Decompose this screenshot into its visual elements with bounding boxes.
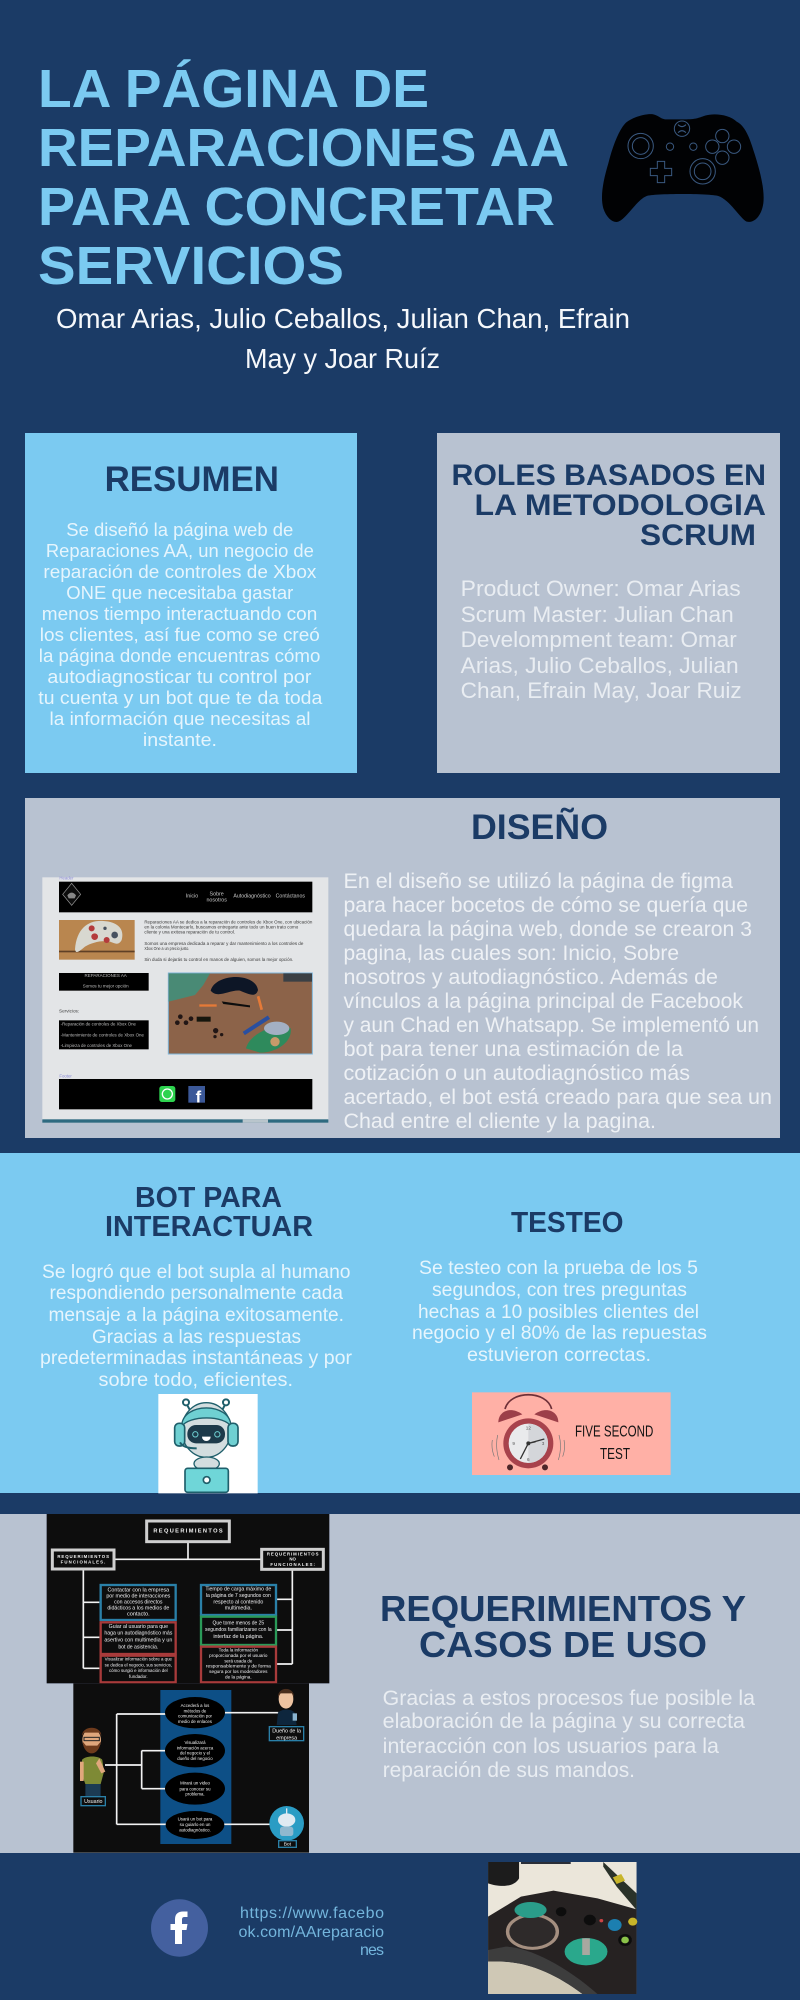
text: roles body: Develompment team: Omar	[461, 627, 737, 652]
use cases: Usará un bot para	[178, 1817, 213, 1822]
image: five second test: FIVE SECOND	[575, 1424, 653, 1441]
boxes: non functional requirements: segundos familiarizarse con la	[205, 1627, 273, 1633]
use cases: Visualizará	[184, 1740, 206, 1745]
mockup: header bar	[59, 882, 312, 912]
diagram: requerimientos	[47, 1514, 329, 1683]
authors	[56, 303, 630, 374]
heading: bot para interactuar: INTERACTUAR	[105, 1211, 313, 1243]
boxes: non functional requirements: proporcionada por el usuario	[209, 1653, 268, 1658]
text: resumen body: la información que necesitas al	[50, 709, 310, 729]
title: PARA CONCRETAR	[38, 177, 555, 237]
mockup: services box: -Reparación de controles de Xbox One	[61, 1022, 136, 1027]
text: resumen body: los clientes, así fue como se creó	[40, 625, 320, 645]
mockup: footer bar with social icons	[59, 1079, 312, 1109]
boxes: functional requirements: asertivo con multimedia y un	[104, 1638, 172, 1644]
boxes: functional requirements: fundador.	[129, 1674, 148, 1679]
link: facebook url: nes	[360, 1942, 384, 1959]
text: roles body: Arias, Julio Ceballos, Julian	[461, 653, 739, 678]
screenshot: web page mockup: Servicios:	[59, 1009, 79, 1014]
boxes: non functional requirements: interfaz de la página.	[213, 1634, 264, 1640]
mockup: footer bar with social icons: f	[196, 1088, 202, 1107]
authors: May y Joar Ruíz	[245, 343, 440, 374]
text: diseño body: nosotros y autodiagnóstico. Además de	[344, 966, 718, 989]
boxes: non functional requirements: de la página.	[225, 1675, 252, 1680]
image: five second test: 9	[512, 1441, 515, 1446]
box: requerimientos funcionales: REQUERIMIENTOS	[57, 1554, 109, 1559]
text: testeo body	[412, 1258, 707, 1366]
figure: bot	[269, 1806, 304, 1848]
mockup: slogan box	[59, 973, 149, 991]
text: diseño body: Chad entre el cliente y la pagina.	[344, 1110, 656, 1133]
text: bot body	[40, 1262, 353, 1391]
use cases: autodiagnóstico.	[179, 1828, 211, 1833]
screenshot: web page mockup: Header	[59, 876, 74, 881]
box: requerimientos funcionales	[52, 1550, 114, 1569]
boxes: functional requirements: didácticos a los medios de	[107, 1606, 169, 1612]
text: requerimientos body: interacción con los usuarios para la	[383, 1735, 719, 1758]
text: roles body: Scrum Master: Julian Chan	[461, 602, 734, 627]
text: requerimientos body: elaboración de la página y su correcta	[383, 1710, 745, 1733]
heading: requerimientos y casos de uso: CASOS DE USO	[419, 1624, 707, 1665]
heading: roles	[452, 459, 766, 552]
text: diseño body: vínculos a la página principal de Facebook	[344, 990, 743, 1013]
text: diseño body: bot para tener una estimación de la	[344, 1038, 683, 1061]
box: requerimientos no funcionales: FUNCIONALES:	[270, 1562, 316, 1567]
panel: diseño	[25, 798, 780, 1138]
boxes: non functional requirements: Toda la información	[219, 1647, 259, 1652]
text: testeo body: segundos, con tres preguntas	[432, 1280, 687, 1301]
figure: usuario	[80, 1728, 105, 1806]
use cases: problema.	[185, 1792, 205, 1797]
use cases: para conocer su	[179, 1786, 211, 1791]
mockup: services box: -Mantenimiento de controles de Xbox One	[61, 1032, 144, 1037]
text: testeo body: hechas a 10 posibles clientes del	[418, 1302, 699, 1323]
text: diseño body: cotización o un autodiagnóstico más	[344, 1062, 690, 1085]
screenshot: web page mockup: Footer	[59, 1073, 72, 1078]
panel: resumen	[25, 433, 357, 773]
boxes: functional requirements: con accesos directos	[114, 1599, 163, 1605]
authors: Omar Arias, Julio Ceballos, Julian Chan, Efrain	[56, 303, 630, 334]
box: requerimientos root: REQUERIMIENTOS	[153, 1529, 223, 1535]
boxes: functional requirements: haga un autodiagnóstico más	[104, 1631, 173, 1637]
boxes: non functional requirements: responsablemente y de forma	[206, 1664, 271, 1669]
text: roles body: Chan, Efrain May, Joar Ruiz	[461, 678, 742, 703]
mockup: intro text: Somos una empresa dedicada a reparar y dar mantenimiento a los controles de	[144, 941, 304, 946]
text: diseño body: quedara la página web, donde se crearon 3	[344, 918, 752, 941]
figure: dueño de la empresa	[269, 1689, 304, 1741]
text: testeo body: negocio y el 80% de las repuestas	[412, 1323, 707, 1344]
text: testeo body: estuvieron correctas.	[467, 1345, 651, 1366]
heading: requerimientos y casos de uso	[380, 1588, 746, 1665]
boxes: non functional requirements: Tiempo de carga máximo de	[205, 1587, 271, 1593]
image: five second test: TEST	[600, 1446, 630, 1463]
figure: dueño de la empresa: Dueño de la	[272, 1729, 301, 1735]
mockup: services box	[59, 1020, 149, 1049]
mockup: header bar: nosotros	[206, 898, 227, 904]
use cases: métodos de	[184, 1708, 207, 1713]
text: diseño body	[344, 870, 772, 1133]
text: diseño body: En el diseño se utilizó la página de figma	[344, 870, 733, 893]
panel: bot and testeo band	[0, 1153, 800, 1493]
heading: requerimientos y casos de uso: REQUERIMIENTOS Y	[380, 1588, 746, 1629]
boxes: non functional requirements: multimedia.	[225, 1606, 252, 1612]
mockup: intro text: cliente y una exitosa reparación de tu control.	[144, 930, 235, 935]
text: resumen body: Se diseñó la página web de	[66, 520, 293, 540]
figure: bot: Bot	[284, 1842, 292, 1848]
screenshot: web page mockup	[42, 876, 328, 1123]
mockup: intro text: Reparaciones AA se dedica a la reparación de controles de Xbox One, con ubicación	[144, 920, 313, 925]
link: facebook url: https://www.facebo	[240, 1905, 384, 1922]
text: bot body: predeterminadas instantáneas y por	[40, 1348, 353, 1369]
box: requerimientos no funcionales: NO	[289, 1556, 297, 1561]
boxes: functional requirements: Visualizar información sobre a que	[105, 1657, 173, 1662]
heading: bot para interactuar	[105, 1182, 313, 1243]
image: five second test: 6	[527, 1457, 530, 1462]
link: facebook url: ok.com/AAreparacio	[238, 1924, 384, 1941]
title: REPARACIONES AA	[38, 118, 569, 178]
text: resumen body: Reparaciones AA, un negocio de	[46, 541, 314, 561]
boxes: non functional requirements: será usada de	[224, 1658, 253, 1663]
heading: roles: ROLES BASADOS EN	[452, 459, 766, 492]
boxes: non functional requirements: la página de 7 segundos con	[206, 1593, 271, 1599]
image: five second test	[472, 1392, 671, 1475]
mockup: header bar: Sobre	[210, 892, 224, 898]
mockup: header bar: Autodiagnóstico	[233, 893, 271, 899]
text: resumen body: autodiagnosticar tu control por	[47, 667, 311, 687]
text: diseño body: para hacer bocetos de cómo se quería que	[344, 894, 748, 917]
text: bot body: sobre todo, eficientes.	[98, 1370, 293, 1391]
boxes: non functional requirements: Que tome menos de 25	[212, 1621, 264, 1627]
heading: testeo: TESTEO	[511, 1207, 624, 1239]
boxes: functional requirements: se dedica el negocio, sus servicios,	[105, 1662, 172, 1667]
boxes: functional requirements: bot de asistencia.	[118, 1644, 159, 1650]
box: requerimientos root	[147, 1521, 229, 1542]
icon: game controller	[602, 114, 764, 222]
mockup: intro text: Sin duda si dejarás tu control en manos de alguien, somos la mejor opción.	[144, 957, 293, 962]
text: resumen body: reparación de controles de Xbox	[43, 562, 316, 582]
text: diseño body: acertado, el bot está creado para que sea un	[344, 1086, 772, 1109]
use cases: medio de enlaces	[178, 1719, 212, 1724]
text: roles body	[461, 576, 742, 703]
boxes: functional requirements: cómo surgió e información del	[109, 1668, 168, 1673]
box: requerimientos no funcionales: REQUERIMIENTOS	[267, 1551, 319, 1556]
panel: roles scrum	[437, 433, 780, 773]
diagram: casos de uso	[73, 1683, 309, 1853]
use cases: Mirará un video	[180, 1781, 210, 1786]
heading: bot para interactuar: BOT PARA	[135, 1182, 282, 1214]
text: bot body: mensaje a la página exitosamente.	[48, 1305, 344, 1326]
use cases	[165, 1697, 225, 1839]
text: diseño body: pagina, las cuales son: Inicio, Sobre	[344, 942, 679, 965]
use cases: del negocio y el	[180, 1751, 210, 1756]
box: requerimientos no funcionales	[262, 1549, 323, 1569]
image: five second test: 3	[542, 1441, 545, 1446]
heading: roles: LA METODOLOGIA	[474, 489, 766, 522]
heading: diseño: DISEÑO	[471, 808, 608, 847]
use cases: Accederá a los	[181, 1703, 209, 1708]
mockup: intro text: en la colonia Montecarlo, buscamos entregarte ante todo un buen trato como	[144, 925, 299, 930]
boxes: non functional requirements	[201, 1585, 276, 1682]
text: bot body: Gracias a las respuestas	[92, 1327, 301, 1348]
mockup: slogan box: Somos tu mejor opción	[83, 984, 129, 989]
use cases: comunicación por	[178, 1714, 213, 1719]
mockup: slogan box: REPARACIONES AA	[85, 973, 127, 978]
boxes: functional requirements: Contactar con la empresa	[107, 1587, 170, 1593]
boxes: functional requirements	[101, 1585, 176, 1682]
text: diseño body: y aun Chad en Whatsapp. Se implementó un	[344, 1014, 759, 1037]
heading: resumen: RESUMEN	[105, 460, 279, 499]
text: resumen body: tu cuenta y un bot que te da toda	[38, 688, 323, 708]
use cases: información acerca	[177, 1745, 214, 1750]
text: bot body: Se logró que el bot supla al humano	[42, 1262, 350, 1283]
boxes: non functional requirements: respecto al contenido	[213, 1600, 263, 1606]
mockup: disassembled controller photo	[168, 973, 312, 1054]
boxes: functional requirements: por medio de interacciones	[106, 1593, 171, 1599]
figure: dueño de la empresa: empresa	[276, 1735, 297, 1741]
panel: requerimientos y casos de uso	[0, 1514, 800, 1853]
text: resumen body	[38, 520, 323, 750]
icon: robot with laptop	[158, 1394, 258, 1493]
link: facebook url	[238, 1905, 384, 1959]
mockup: header bar: Inicio	[186, 893, 198, 899]
mockup: intro text: Xbox One a un precio justo.	[144, 946, 189, 951]
text: resumen body: la página donde encuentras cómo	[39, 646, 320, 666]
boxes: non functional requirements: segura por los moderadores	[209, 1669, 268, 1674]
mockup: intro text	[144, 920, 313, 962]
text: requerimientos body: Gracias a estos procesos fue posible la	[383, 1687, 755, 1710]
text: requerimientos body	[383, 1687, 755, 1782]
image: five second test: 12	[526, 1425, 531, 1430]
use cases: su guiarlo en un	[180, 1822, 211, 1827]
box: requerimientos funcionales: FUNCIONALES.	[61, 1559, 105, 1564]
figure: usuario: Usuario	[84, 1799, 103, 1805]
mockup: header bar: Contáctanos	[276, 893, 305, 899]
mockup: services box: -Limpieza de controles de Xbox One	[61, 1043, 132, 1048]
text: resumen body: ONE que necesitaba gastar	[66, 583, 293, 603]
text: testeo body: Se testeo con la prueba de los 5	[419, 1258, 698, 1279]
heading: roles: SCRUM	[640, 519, 756, 552]
title	[38, 59, 569, 296]
title: LA PÁGINA DE	[38, 59, 429, 119]
text: bot body: respondiendo personalmente cada	[50, 1283, 343, 1304]
text: resumen body: instante.	[143, 730, 217, 750]
use cases: dueño del negocio	[177, 1756, 213, 1761]
photo: opened controller	[488, 1862, 637, 1994]
boxes: functional requirements: Guiar al usuario para que	[109, 1624, 168, 1630]
text: requerimientos body: reparación de sus mandos.	[383, 1759, 635, 1782]
boxes: functional requirements: contacto.	[127, 1612, 150, 1618]
title: SERVICIOS	[38, 236, 344, 296]
text: roles body: Product Owner: Omar Arias	[461, 576, 741, 601]
icon: facebook	[151, 1899, 208, 1957]
mockup: controller photo	[59, 920, 135, 960]
text: resumen body: menos tiempo interactuando con	[42, 604, 317, 624]
